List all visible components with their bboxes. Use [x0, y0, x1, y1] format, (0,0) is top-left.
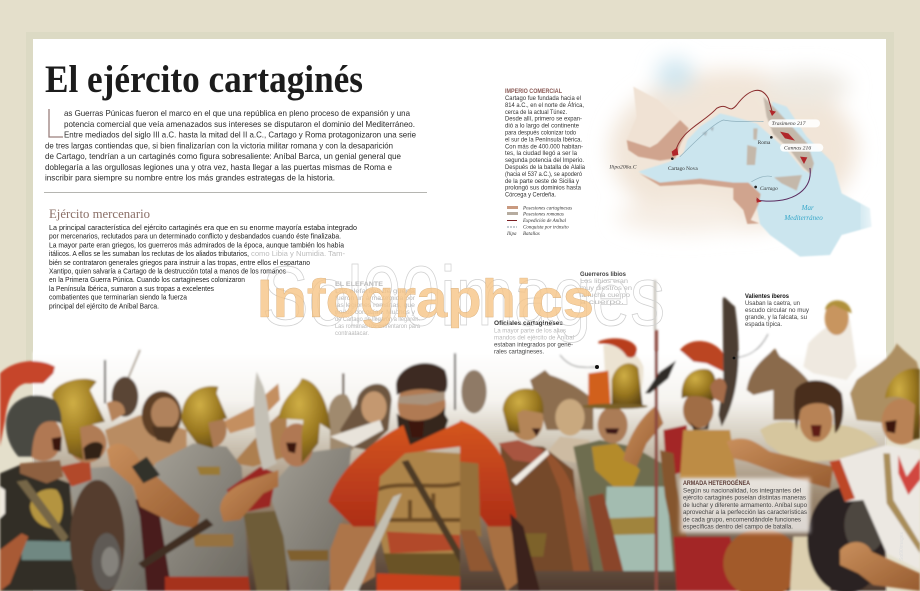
sidebar: imperio comercial: para después colonizar todo — [505, 130, 577, 136]
map legend: Posesiones romanas — [522, 212, 564, 218]
shield — [70, 480, 125, 591]
section text: Xantipo, quien salvaría a Cartago de la destrucción total a manos de los romanos — [49, 266, 286, 276]
muscled arm with bracer — [107, 444, 213, 568]
callout: oficiales cartagineses: Oficiales cartagineses — [494, 320, 564, 327]
watermark: Sol90images — [262, 249, 665, 343]
faded text block: elefantes: Las romanas los enfrentaron para — [335, 323, 421, 330]
map labels: Cartago — [760, 186, 778, 192]
section heading: Ejército mercenario — [49, 207, 150, 221]
section text: en la Primera Guerra Púnica. Cuando los cartagineses colonizaron — [49, 275, 245, 284]
rider and horses — [747, 300, 920, 427]
sea — [638, 102, 872, 257]
section text: principal del ejército de Aníbal Barca. — [49, 301, 159, 310]
map labels: Mediterráneo — [783, 214, 823, 222]
panel: armada heterogenea: de luchar y diferente armamento. Aníbal supo — [683, 502, 808, 509]
callout: oficiales cartagineses: rales cartagineses. — [494, 348, 544, 356]
callout: valientes iberos: espada típica. — [745, 321, 782, 328]
callout: oficiales cartagineses — [494, 320, 574, 356]
Italy — [763, 97, 814, 174]
faded text block: elefantes: contraatacar. — [335, 330, 369, 337]
sidebar: imperio comercial — [505, 89, 586, 199]
sidebar: imperio comercial: dió a lo largo del continente — [505, 124, 580, 130]
intro text: inscribir para siempre su nombre entre los más grandes estrategas de la historia. — [45, 172, 335, 182]
soldier with brown tunic — [498, 389, 590, 571]
Iberia north — [633, 86, 658, 116]
callout: guerreros libios — [580, 271, 633, 306]
Sicily — [774, 175, 802, 191]
map legend: Expedición de Aníbal — [522, 219, 567, 224]
section text: itálicos. A ellos se les sumaban los reclutas de los aliados tributarios, — [49, 249, 249, 258]
drop cap — [49, 109, 63, 137]
panel: armada heterogenea: específicas dentro del campo de batalla. — [683, 524, 793, 530]
section text: la Península Ibérica, sumaron a sus tropas a excelentes — [49, 284, 214, 293]
sidebar: imperio comercial: Córcega y Cerdeña. — [505, 193, 556, 199]
soldier 2: gold helmet, mail — [52, 379, 147, 591]
Sardinia — [747, 145, 757, 165]
panel: armada heterogenea: de cada grupo, encomendándole funciones — [683, 516, 801, 523]
officer — [573, 338, 677, 571]
section text: bién se contrataron generales griegos para instruir a las tropas, entre ellos el espartano — [49, 258, 310, 267]
map labels: Ilipa206a.C — [608, 164, 637, 170]
sidebar: imperio comercial: (hacia el 537 a.C.), se apoderó — [505, 172, 583, 178]
intro text: Entre mediados del siglo III a.C. hasta la mitad del II a.C., Cartago y Roma protagonizaron una serie — [64, 130, 416, 140]
routes — [675, 90, 810, 201]
map: Mediterranean — [603, 51, 872, 258]
left half of the army — [0, 350, 460, 591]
callout: guerreros libios: muy diestros en — [580, 285, 633, 292]
intro text: potencia comercial que veía amenazados sus intereses se disputaron el dominio del Mediterráneo. — [64, 119, 415, 129]
credit: Sol90images — [899, 532, 905, 561]
soldier in white tunic — [829, 368, 920, 591]
man in cream cloak — [760, 380, 878, 591]
faded text block: elefantes — [335, 281, 421, 337]
callout: guerreros libios: Los libios eran — [580, 278, 629, 285]
extended arm — [727, 439, 833, 488]
panel: armada heterogenea: ejército cartaginés poseían distintas maneras — [683, 494, 806, 502]
section text: como Libia y Numidia. Tam- — [251, 249, 346, 258]
callout: oficiales cartagineses: estaban integrados por gene- — [494, 342, 573, 348]
sidebar: imperio comercial: Cartago fue fundada hacia el — [505, 96, 581, 102]
section text: La principal característica del ejército cartaginés era que en su enorme mayoría estaba integrado — [49, 223, 357, 232]
section text: La mayor parte eran griegos, los guerreros más admirados de la época, aunque también los había — [49, 240, 344, 249]
callout: guerreros libios: la lucha cuerpo — [580, 292, 631, 299]
callout: valientes iberos: Valientes íberos — [745, 293, 790, 300]
panel: armada heterogenea — [680, 478, 810, 533]
sidebar: imperio comercial: Con más de 400.000 habitan- — [505, 144, 583, 150]
callout: valientes iberos — [745, 293, 810, 328]
callout line: oficiales — [560, 355, 597, 367]
sidebar: imperio comercial: prolongó sus dominios hasta — [505, 186, 582, 192]
spear and spearhead — [645, 280, 676, 591]
map labels — [608, 119, 823, 222]
map legend: Conquista por tránsito — [523, 226, 569, 230]
intro text: de Cartago, tendrían a un cartaginés como figura sobresaliente: Aníbal Barca, un genial general que — [45, 151, 401, 161]
intro text: de tres largas contiendas que, si bien finalizarían con la victoria militar romana y con la desaparición — [45, 140, 393, 150]
black shield — [807, 487, 886, 591]
bare-chested bearded warrior — [105, 391, 187, 467]
Corsica — [753, 128, 758, 140]
hazy ground — [33, 352, 886, 591]
eastern fade — [860, 204, 872, 229]
dark red under-tunic — [133, 497, 173, 591]
title: El ejército cartaginés — [45, 58, 363, 101]
battle scene illustration — [0, 280, 920, 591]
callout: oficiales cartagineses: mandos del ejército de Aníbal — [494, 334, 574, 342]
panel: armada heterogenea: ARMADA HETEROGÉNEA — [683, 479, 750, 487]
sidebar: imperio comercial: Después de la batalla de Alalia — [505, 165, 586, 171]
watermark: Infographics — [257, 269, 594, 329]
soldier 3: gold helmet, mail — [155, 386, 250, 591]
section text — [49, 223, 357, 310]
callout: oficiales cartagineses: La mayor parte de los altos — [494, 328, 566, 334]
section text: combatientes que terminarían siendo la fuerza — [49, 293, 187, 302]
soldier with crest and falcata — [660, 297, 743, 591]
Balearics — [702, 127, 714, 136]
callout: valientes iberos: grande, y la falcata, su — [745, 314, 808, 321]
callout: valientes iberos: escudo circular no muy — [745, 307, 810, 314]
map labels: Roma — [758, 140, 771, 146]
map labels: Trasimeno 217 — [772, 121, 807, 127]
round shield — [723, 528, 800, 591]
faded text block: elefantes: no los conocían. Muchos y — [335, 309, 416, 316]
sidebar: imperio comercial: de la parte oeste de Sicilia y — [505, 179, 579, 185]
sidebar: imperio comercial: segunda potencia del Imperio. — [505, 158, 584, 164]
sidebar: imperio comercial: tes, la ciudad llegó a ser la — [505, 151, 578, 157]
panel: armada heterogenea: Según su nacionalidad, los integrantes del — [683, 487, 801, 494]
map labels: Mar — [801, 204, 814, 212]
callout dots — [595, 357, 735, 369]
background warriors — [105, 350, 455, 467]
Carthaginian Africa — [639, 173, 761, 224]
central warrior — [328, 363, 460, 591]
callout: guerreros libios: Guerreros libios — [580, 271, 627, 278]
map labels: Cannas 216 — [784, 145, 811, 151]
sidebar: imperio comercial: 814 a.C., en el norte de África, — [505, 102, 584, 109]
intro text: doblegaría a las orgullosas legiones una y otra vez, hasta llegar a las puertas mismas de Roma e — [45, 162, 392, 172]
faded text block: elefantes: EL ELEFANTE — [335, 281, 383, 288]
callout line: iberos — [735, 334, 768, 358]
battle markers — [671, 110, 807, 203]
soldier 4: gold helmet, mail, sword — [220, 372, 352, 591]
soldier 1: crest and iron helmet — [0, 361, 77, 591]
intro text — [45, 108, 416, 182]
map legend: Batallas — [523, 232, 540, 237]
land halo — [610, 58, 857, 233]
map labels: Cartago Nova — [668, 166, 698, 172]
right half of the army — [460, 280, 920, 591]
panel: armada heterogenea: aprovechar a la perfección las características — [683, 509, 807, 516]
back figure and horse — [461, 370, 593, 463]
sidebar: imperio comercial: IMPERIO COMERCIAL — [505, 89, 562, 95]
faded text block: elefantes: fueron un arma temida por — [335, 295, 415, 302]
sidebar: imperio comercial: Desde allí, primero se expan- — [505, 117, 582, 123]
callout: valientes iberos: Usaban la caetra, un — [745, 300, 801, 307]
faded text block: elefantes: de Cartago no llegaron a llegaren. — [335, 316, 420, 323]
faded text block: elefantes: Los elefantes de guerra — [335, 288, 416, 295]
sidebar: imperio comercial: el sur de la Península Ibérica. — [505, 137, 582, 143]
callout: guerreros libios: a cuerpo. — [580, 299, 624, 306]
map legend: Posesiones cartaginesas — [522, 206, 572, 212]
Carthaginian Spain — [627, 120, 689, 161]
central warrior: right side of cape — [460, 420, 540, 591]
map legend: Ilipa — [506, 232, 517, 237]
intro text: as Guerras Púnicas fueron el marco en el que una república en pleno proceso de expansión y una — [64, 108, 410, 118]
section text: por mercenarios, reclutados para un determinado conflicto y desbandados cuando éste finalizaba. — [49, 232, 341, 241]
sidebar: imperio comercial: cerca de la actual Túnez. — [505, 110, 567, 116]
faded text block: elefantes: las legiones romanas, que — [335, 302, 416, 309]
map legend — [506, 206, 572, 237]
